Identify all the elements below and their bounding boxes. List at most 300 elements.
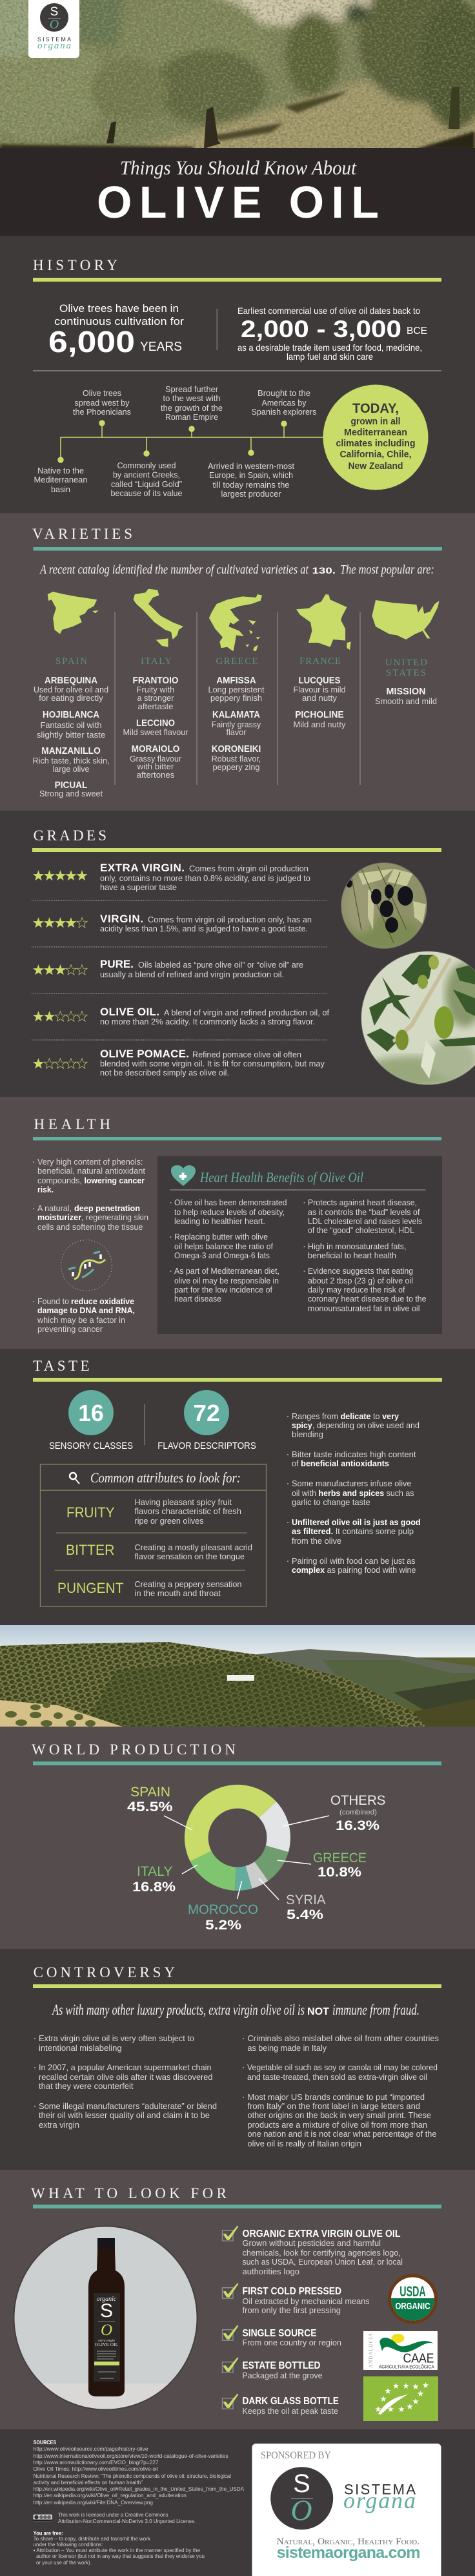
footer: license: • Attribution – You must attribute the work in the manner specified by the	[34, 2547, 200, 2553]
title: Things You Should Know About	[120, 156, 357, 179]
intro sentence: immune from fraud.	[332, 2002, 419, 2018]
fraud notes: right column: one nation and it is not clear what percentage of the	[248, 2130, 437, 2139]
column: greece: Robust flavor,	[212, 754, 261, 763]
column: spain: MANZANILLO	[41, 746, 101, 756]
panel: world production	[32, 1741, 441, 1933]
heart benefits: left column: Olive oil has been demonstrated	[174, 1198, 287, 1207]
label: greece: GREECE	[313, 1851, 367, 1865]
panel: varieties	[32, 526, 442, 798]
footer: sources: Nutritional Research Review: “The phenolic compounds of olive oil: structure, biological	[34, 2473, 231, 2479]
benefit: phenols: Very high content of phenols:	[37, 1158, 143, 1167]
photo: black olives	[339, 860, 429, 951]
fraud notes: left column: intentional mislabeling	[39, 2044, 122, 2053]
donut slice: spain	[185, 1785, 276, 1862]
callout: today	[323, 385, 429, 490]
heart benefits: left column: Omega-3 and Omega-6 fats	[174, 1251, 270, 1260]
grade: virgin: acidity less than 1.5%, and is judged to have a good taste.	[100, 924, 308, 933]
timeline label: phoenicians: the Phoenicians	[73, 408, 131, 417]
benefit: moisturizer: , regenerating skin	[81, 1213, 148, 1222]
footer: sources: activity and beneficial effects on human health”	[34, 2479, 143, 2486]
maps	[48, 589, 440, 651]
column: italy: ITALY	[141, 656, 172, 667]
grade: pure	[33, 958, 303, 979]
timeline label: spain: largest producer	[221, 490, 281, 499]
attribute: fruity: FRUITY	[66, 1504, 115, 1521]
sponsor card	[252, 2444, 441, 2576]
callout: today: TODAY,	[352, 401, 399, 416]
timeline label: americas: Americas by	[262, 399, 307, 408]
checklist item: single source: From one country or region	[243, 2338, 341, 2347]
grade: olive oil: no more than 2% acidity. It commonly lacks a strong flavor.	[100, 1017, 315, 1026]
checklist item: organic: chemicals, look for certifying agencies logo,	[243, 2248, 401, 2258]
label: italy: 16.8%	[132, 1880, 176, 1895]
panel: history	[33, 257, 441, 499]
attributes box: Common attributes to look for:	[90, 1470, 241, 1486]
heart benefits: right column: daily may reduce the risk of	[308, 1285, 405, 1294]
icon: caae logo: ANDALUCÍA	[367, 2333, 374, 2368]
icon: cc badge	[34, 2515, 52, 2521]
panel: grades	[32, 827, 475, 1088]
controversy bar	[33, 1984, 441, 1988]
stat: 72 flavor descriptors	[157, 1390, 256, 1451]
timeline label: spain: Arrived in western-most	[208, 462, 295, 471]
fraud notes: right column: and taste-treated, then sold as extra-virgin olive oil	[247, 2073, 427, 2082]
heart benefits: left column: leading to healthier heart.	[174, 1217, 265, 1226]
footer: license: or your use of the work).	[36, 2559, 92, 2566]
stat: 72 flavor descriptors: 72	[193, 1400, 220, 1426]
fraud notes: right column: products are a mixture of olive oil from more than	[248, 2121, 427, 2130]
grade: olive pomace	[33, 1048, 325, 1077]
column: greece: peppery finish	[210, 694, 262, 703]
checklist item: organic: authorities logo	[243, 2267, 299, 2276]
checklist item: estate bottled: ESTATE BOTTLED	[243, 2360, 320, 2371]
icon: caae logo	[363, 2331, 438, 2370]
heading: taste: TASTE	[33, 1358, 89, 1374]
label: morocco	[188, 1902, 258, 1933]
stat: 16 sensory classes: SENSORY CLASSES	[49, 1440, 133, 1451]
timeline label: greeks: Commonly used	[117, 461, 176, 470]
column: france	[293, 656, 346, 729]
column: greece: KALAMATA	[212, 710, 260, 720]
stat: 2,000-3,000 BCE: 2,000 - 3,000	[241, 316, 401, 342]
grade: virgin	[33, 913, 312, 933]
logo card: SISTEMA	[37, 36, 71, 43]
timeline label: phoenicians: Olive trees	[83, 389, 121, 398]
label: others: OTHERS	[330, 1793, 386, 1808]
footer: sources	[34, 2439, 244, 2506]
label: greece: 10.8%	[318, 1865, 361, 1880]
column: italy: Grassy flavour	[130, 754, 181, 763]
heart benefits: left column: oil helps balance the ratio of	[174, 1242, 274, 1251]
attribute: pungent: Creating a peppery sensation	[134, 1580, 242, 1589]
heart benefits: left column: Replacing butter with olive	[174, 1232, 268, 1241]
photo: bottle: OLIVE OIL	[95, 2342, 118, 2347]
column: greece: Long persistent	[208, 685, 265, 694]
footer: sources: http://www.oliveoilsource.com/page/history-olive	[34, 2446, 148, 2452]
benefit: moisturizer: A natural,	[37, 1204, 72, 1213]
footer: license	[34, 2511, 205, 2566]
attribute: fruity	[66, 1498, 241, 1526]
checklist item: organic: ORGANIC EXTRA VIRGIN OLIVE OIL	[243, 2228, 400, 2239]
checklist item: organic: such as USDA, European Union Leaf, or local	[243, 2257, 403, 2267]
icon: map of italy	[134, 589, 183, 647]
sponsor card: sistemaorgana.com	[277, 2544, 421, 2562]
footer: license: Attribution-NonCommercial-NoDerivs 3.0 Unported License.	[58, 2518, 196, 2524]
taste notes list: Bitter taste indicates high content	[292, 1450, 416, 1459]
stat: 16 sensory classes: 16	[78, 1400, 104, 1426]
benefit: dna damage: Found to	[37, 1297, 69, 1306]
benefit: phenols: beneficial, natural antioxidant	[37, 1167, 146, 1176]
benefit: dna damage: damage to DNA and RNA,	[37, 1306, 135, 1315]
footer: sources: http://en.wikipedia.org/wiki/Olive_oil_regulation_and_adulteration	[34, 2492, 187, 2498]
attributes box	[40, 1464, 266, 1606]
timeline label: romans: to the west with	[163, 394, 221, 403]
heart benefits: right column: coronary heart disease due to the	[308, 1294, 427, 1304]
fraud notes: left column: that they were counterfeit	[39, 2082, 134, 2091]
taste notes list: oil with herbs and spices such as	[292, 1489, 414, 1498]
grade: virgin: VIRGIN.	[100, 913, 143, 925]
fraud notes: left column: In 2007, a popular American supermarket chain	[39, 2063, 212, 2072]
heading: what to look for: WHAT TO LOOK FOR	[31, 2185, 227, 2201]
benefit: dna damage	[33, 1297, 135, 1334]
timeline label: romans	[161, 385, 223, 422]
timeline label: native: Native to the	[37, 466, 84, 475]
checklist item: dark glass bottle: DARK GLASS BOTTLE	[243, 2396, 339, 2407]
rating: one star	[33, 1058, 87, 1068]
column: france: and nutty	[302, 694, 338, 703]
fraud notes: left column: Some illegal manufacturers “adulterate” or blend	[39, 2102, 217, 2111]
fraud notes: left column: their oil with lesser quality oil and claim it to be	[39, 2111, 210, 2120]
benefit: phenols: compounds,	[37, 1176, 82, 1185]
label: spain	[127, 1785, 173, 1814]
benefit: phenols: risk.	[37, 1185, 54, 1194]
rating: three stars	[33, 964, 87, 975]
icon: caae logo: CAAE	[403, 2352, 434, 2366]
checklist item: first cold pressed	[222, 2283, 370, 2315]
checklist item: estate bottled	[222, 2358, 323, 2380]
column: italy: aftertaste	[138, 702, 174, 711]
attribute: fruity: Having pleasant spicy fruit	[134, 1498, 232, 1507]
timeline label: native	[34, 466, 88, 494]
heading: history: HISTORY	[33, 257, 117, 273]
photo: bottle: organic	[97, 2296, 117, 2303]
column: italy: LECCINO	[136, 718, 175, 729]
taste bar	[33, 1378, 442, 1382]
attribute: pungent: PUNGENT	[57, 1580, 124, 1596]
donut slice: syria	[245, 1862, 268, 1889]
timeline label: romans: the growth of the	[161, 404, 223, 413]
footer: sources: http://www.internationaloliveoil.org/store/view/10-world-catalogue-of-olive-varieties	[34, 2453, 228, 2459]
intro sentence: A recent catalog identified the number of cultivated varieties at	[39, 563, 308, 577]
taste notes list: as filtered. It contains some pulp	[292, 1527, 414, 1536]
checklist item: single source: SINGLE SOURCE	[243, 2328, 316, 2339]
logo card: S	[50, 5, 58, 19]
panel: taste	[33, 1358, 442, 1606]
timeline label: spain: Europe, in Spain, which	[209, 471, 293, 480]
attribute: bitter	[66, 1542, 252, 1561]
benefit: dna damage: reduce oxidative	[71, 1297, 134, 1306]
rating: five stars	[33, 870, 88, 880]
timeline label: romans: Spread further	[165, 385, 218, 394]
grade: extra virgin: EXTRA VIRGIN.	[100, 862, 185, 874]
column: greece: GREECE	[216, 656, 258, 667]
column: italy: Fruity with	[137, 685, 174, 694]
grade: olive pomace: Refined pomace olive oil often	[192, 1050, 301, 1059]
column: spain: Rich taste, thick skin,	[32, 756, 110, 765]
grade: olive oil	[33, 1006, 330, 1026]
fraud notes: left column	[34, 2034, 217, 2130]
icon: usda organic seal	[387, 2274, 439, 2324]
timeline label: spain: till today remains the	[213, 481, 290, 490]
title: OLIVE OIL	[97, 177, 379, 227]
icon: heart with cross	[171, 1165, 196, 1186]
label: italy: ITALY	[137, 1864, 173, 1879]
rating: four stars	[33, 917, 87, 928]
grade: olive pomace: OLIVE POMACE.	[100, 1048, 189, 1060]
column: greece: peppery zing	[213, 763, 260, 772]
fraud notes: right column: other origins on the back in very small print. These	[248, 2111, 431, 2120]
footer: license: This work is licensed under a Creative Commons	[58, 2511, 168, 2518]
stat: 2,000-3,000 BCE: lamp fuel and skin care	[287, 351, 373, 362]
benefit: phenols: lowering cancer	[84, 1176, 145, 1185]
timeline label: phoenicians: spread west by	[75, 399, 130, 408]
fraud notes: right column	[243, 2034, 439, 2148]
grade: olive oil: OLIVE OIL.	[100, 1006, 159, 1018]
attribute: bitter: Creating a mostly pleasant acrid	[134, 1543, 252, 1552]
taste notes list: garlic to change taste	[292, 1498, 370, 1507]
timeline label: greeks	[111, 461, 183, 498]
photo: bottle: extra virgin	[98, 2339, 115, 2343]
label: greece	[313, 1851, 367, 1880]
footer: license: You are free:	[34, 2530, 63, 2537]
heart benefits: right column: High in monosaturated fats,	[308, 1242, 407, 1251]
timeline label: native: Mediterranean	[34, 475, 88, 484]
column: united states: UNITED	[385, 658, 427, 668]
grade: virgin: Comes from virgin oil production only, has an	[148, 915, 312, 924]
heart heading: Heart Health Benefits of Olive Oil	[199, 1169, 363, 1185]
timeline label: americas	[252, 389, 316, 417]
column: spain: HOJIBLANCA	[43, 710, 99, 720]
varieties bar	[34, 547, 442, 550]
benefit: moisturizer: cells and softening the tissue	[37, 1223, 143, 1232]
heart benefits: right column: Protects against heart disease,	[308, 1198, 417, 1207]
column: france: LUCQUES	[298, 676, 341, 686]
stat: 2,000-3,000 BCE	[237, 306, 427, 362]
heart benefits: left column: As part of Mediterranean diet,	[174, 1267, 279, 1276]
heart benefits: left column: to help reduce levels of obesity,	[174, 1208, 285, 1217]
column: italy: with bitter	[136, 762, 174, 771]
label: spain: SPAIN	[130, 1785, 170, 1800]
donut chart	[185, 1785, 290, 1891]
attribute: bitter: BITTER	[66, 1542, 115, 1558]
heart benefits: right column: of the “good” cholesterol, HDL	[308, 1226, 414, 1235]
bottle body	[88, 2238, 125, 2396]
sponsor logo: organa	[343, 2488, 416, 2513]
column: united states: Smooth and mild	[375, 697, 437, 706]
donut slice: others	[259, 1802, 290, 1852]
grade: extra virgin	[33, 862, 310, 892]
attribute: fruity: ripe or green olives	[134, 1517, 204, 1526]
checklist item: first cold pressed: from only the first pressing	[243, 2305, 341, 2315]
history bar	[33, 278, 441, 282]
taste notes list: blending	[292, 1430, 323, 1439]
rating: two stars	[33, 1011, 87, 1021]
footer: sources: Olive Oil Times: http://www.oliveoiltimes.com/olive-oil	[34, 2466, 158, 2472]
column: italy: FRANTOIO	[133, 676, 178, 686]
fraud notes: right column: olive oil is really of Italian origin	[248, 2139, 361, 2148]
checklist item: estate bottled: Packaged at the grove	[243, 2371, 323, 2380]
fraud notes: right column: as being made in Italy	[248, 2044, 327, 2053]
heart benefits: right column: Evidence suggests that eating	[308, 1267, 413, 1276]
label: spain: 45.5%	[127, 1800, 173, 1814]
intro sentence: 130.	[312, 565, 336, 576]
stat: 2,000-3,000 BCE: BCE	[407, 326, 427, 337]
checklist item: single source	[222, 2325, 341, 2347]
taste notes list: of beneficial antioxidants	[292, 1459, 389, 1468]
taste notes list: from the olive	[292, 1537, 341, 1546]
timeline	[34, 385, 324, 499]
taste notes list: Ranges from delicate to very	[292, 1412, 399, 1421]
sponsor card: SPONSORED BY	[261, 2450, 331, 2461]
icon: magnifier	[70, 1473, 79, 1484]
checklist item: organic: Grown without pesticides and harmful	[243, 2238, 381, 2248]
sponsor logo: SISTEMA	[344, 2482, 416, 2498]
what to look for bar	[33, 2205, 441, 2208]
grade: olive pomace: blended with some virgin oil. It is fit for consumption, but may	[100, 1059, 325, 1068]
timeline label: americas: Spanish explorers	[252, 408, 316, 417]
column: italy: aftertones	[137, 771, 174, 780]
column: greece: Faintly grassy	[212, 720, 261, 729]
column: italy	[123, 656, 188, 780]
taste notes list: spicy, depending on olive used and	[292, 1421, 419, 1430]
footer: license: To share – to copy, distribute and transmit the work	[34, 2535, 151, 2542]
grade: olive oil: A blend of virgin and refined production oil, of	[164, 1008, 330, 1017]
photo: hillside olive groves	[0, 1625, 475, 1727]
heart benefits: left column: heart disease	[174, 1294, 221, 1304]
column: italy: Mild sweet flavour	[123, 728, 188, 737]
footer: sources: http://en.wikipedia.org/wiki/Olive_oil#Retail_grades_in_the_United_States_from_the_USDA	[34, 2486, 244, 2492]
stat: 2,000-3,000 BCE: Earliest commercial use of olive oil dates back to	[237, 306, 420, 316]
benefit: moisturizer: deep penetration	[74, 1204, 140, 1213]
donut slice: greece	[254, 1845, 288, 1881]
column: spain: Fantastic oil with	[40, 721, 102, 730]
attribute: bitter: flavor sensation on the tongue	[134, 1552, 245, 1561]
sponsor logo: O	[290, 2494, 312, 2527]
photo: bottle	[13, 2225, 200, 2416]
column: italy: MORAIOLO	[132, 744, 179, 754]
photo: bottle: S	[100, 2300, 113, 2322]
footer: license: under the following conditions:	[34, 2541, 103, 2548]
checklist item: dark glass bottle: Keeps the oil at peak taste	[243, 2406, 338, 2416]
benefit: dna damage: which may be a factor in	[37, 1316, 125, 1325]
benefit: moisturizer	[33, 1204, 148, 1232]
footer: license: author or licensor (but not in any way that suggests that they endorse you	[36, 2553, 205, 2559]
column: greece: KORONEIKI	[212, 744, 261, 754]
taste notes list: complex as pairing food with wine	[292, 1566, 416, 1575]
intro sentence: The most popular are:	[340, 563, 434, 577]
column: spain: ARBEQUINA	[45, 676, 97, 686]
logo card	[28, 0, 79, 58]
icon: dna helix	[61, 1240, 112, 1291]
column: france: PICHOLINE	[295, 710, 344, 720]
checklist item: organic	[222, 2226, 403, 2276]
heart benefits: right column: LDL cholesterol and raises levels	[308, 1217, 422, 1226]
column: spain: Strong and sweet	[39, 789, 103, 798]
heart benefits: right column	[303, 1198, 427, 1313]
stat: 6,000 years: YEARS	[140, 340, 182, 354]
timeline label: romans: Roman Empire	[165, 413, 218, 422]
grade: olive pomace: not be described simply as olive oil.	[100, 1068, 229, 1077]
timeline label: greeks: called “Liquid Gold”	[111, 480, 182, 489]
callout: today: New Zealand	[349, 461, 403, 472]
panel: what to look for	[13, 2185, 441, 2421]
hero photo: olive grove	[0, 0, 475, 161]
heart benefits: left column	[170, 1198, 287, 1304]
fraud notes: right column: from Italy” on the front label in large letters and	[248, 2102, 420, 2111]
icon: map of spain	[48, 592, 99, 634]
grade: pure: usually a blend of refined and virgin production oil.	[100, 970, 284, 979]
column: greece: AMFISSA	[216, 676, 256, 686]
intro sentence: As with many other luxury products, extra virgin olive oil is	[52, 2002, 305, 2018]
fraud notes: left column: Extra virgin olive oil is very often subject to	[39, 2034, 194, 2043]
label: italy	[132, 1864, 176, 1895]
icon: usda organic seal: ORGANIC	[395, 2301, 430, 2312]
checklist item: dark glass bottle	[222, 2394, 339, 2416]
heading: varieties: VARIETIES	[32, 526, 132, 542]
column: greece	[208, 656, 265, 772]
column: united states	[375, 658, 437, 706]
donut slice: morocco	[235, 1866, 252, 1891]
stat: 2,000-3,000 BCE: as a desirable trade item used for food, medicine,	[237, 342, 422, 353]
timeline label: greeks: by ancient Greeks,	[113, 470, 180, 479]
grade: extra virgin: Comes from virgin oil production	[189, 864, 308, 873]
stat: 6,000 years: 6,000	[48, 325, 135, 358]
benefit: dna damage: preventing cancer	[37, 1325, 103, 1334]
stat: 6,000 years	[48, 303, 185, 358]
column: greece: flavor	[226, 728, 247, 737]
taste notes list	[287, 1412, 421, 1575]
column: united states: MISSION	[386, 687, 426, 697]
label: morocco: 5.2%	[205, 1918, 241, 1933]
icon: map of usa	[372, 600, 440, 639]
panel: health	[33, 1116, 442, 1334]
heading: health: HEALTH	[34, 1116, 110, 1132]
column: united states: STATES	[386, 668, 426, 678]
callout: today: grown in all	[351, 416, 400, 427]
grade: pure: PURE.	[100, 958, 134, 970]
heart benefits: right column: about 2 tbsp (23 g) of olive oil	[308, 1276, 413, 1285]
heart benefits: right column: monounsaturated fat in olive oil	[308, 1304, 419, 1313]
attribute: fruity: flavors characteristic of fresh	[134, 1507, 241, 1516]
heart benefits: left column: part for the low incidence of	[174, 1285, 273, 1294]
taste notes list: Unfiltered olive oil is just as good	[292, 1518, 421, 1527]
health bar	[33, 1137, 441, 1141]
column: italy: a stronger	[137, 694, 174, 703]
checklist item: first cold pressed: Oil extracted by mechanical means	[243, 2296, 370, 2306]
heart benefits: left column: olive oil may be responsible in	[174, 1276, 279, 1285]
heading: controversy: CONTROVERSY	[34, 1964, 175, 1980]
fraud notes: right column: Most major US brands continue to put “imported	[248, 2093, 425, 2102]
column: spain	[32, 656, 110, 798]
column: spain: for eating directly	[39, 694, 104, 703]
timeline label: americas: Brought to the	[258, 389, 310, 398]
footer: sources: http://www.aromadictionary.com/EVOO_blog/?p=227	[34, 2459, 159, 2466]
photo: green olives	[358, 950, 475, 1088]
callout: today: Mediterranean	[344, 427, 407, 438]
callout: today: climates including	[336, 438, 416, 449]
fraud notes: right column: Vegetable oil such as soy or canola oil may be colored	[247, 2063, 438, 2072]
heart benefits: right column: as it controls the “bad” levels of	[308, 1208, 420, 1217]
